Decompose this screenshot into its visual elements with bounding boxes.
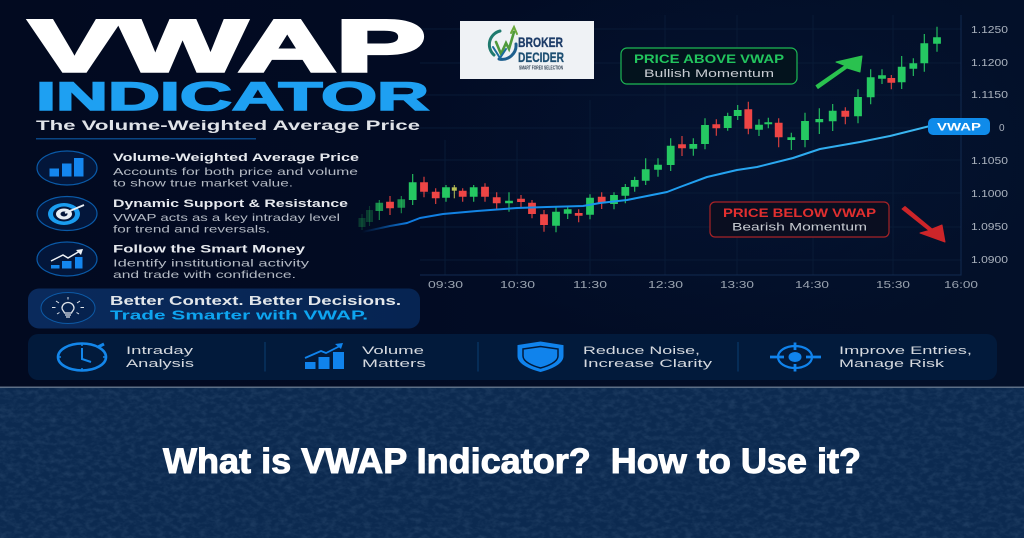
feature: follow the smart money: and trade with confidence. <box>113 270 296 281</box>
VWAP tag <box>928 118 990 135</box>
icon: volume chart <box>305 343 344 369</box>
logo: Broker Decider <box>460 21 594 79</box>
time axis labels: 16:00 <box>944 280 979 291</box>
panel: benefits strip <box>28 334 997 380</box>
icon: bar chart <box>37 151 97 185</box>
icon: stopwatch <box>58 344 106 370</box>
panel: call to action: Better Context. Better Decisions. <box>110 294 401 308</box>
logo: Broker Decider: DECIDER <box>518 49 564 65</box>
panel: call to action <box>28 288 420 328</box>
icon: crosshair <box>770 342 821 372</box>
callout: price above VWAP: Bullish Momentum <box>644 68 774 80</box>
price axis labels: 0 <box>999 123 1005 134</box>
feature: follow the smart money: Follow the Smart Money <box>113 244 305 256</box>
feature: volume-weighted average price: Volume-Weighted Average Price <box>113 152 359 164</box>
logo: Broker Decider: BROKER <box>518 34 563 50</box>
price axis labels: 1.0950 <box>971 222 1009 233</box>
banner: textured footer <box>0 386 1024 538</box>
time axis labels: 13:30 <box>720 280 755 291</box>
callout: price below VWAP <box>710 202 889 237</box>
benefit: reduce noise: Reduce Noise, <box>583 345 700 357</box>
subtitle: The Volume-Weighted Average Price <box>36 117 420 133</box>
callout: price above VWAP <box>621 48 797 84</box>
time axis labels: 15:30 <box>876 280 911 291</box>
icon: rising chart <box>37 242 97 276</box>
arrow: bearish down <box>902 206 945 242</box>
icon: light bulb <box>41 292 95 324</box>
icon: target <box>37 196 97 230</box>
callout: price below VWAP: Bearish Momentum <box>732 222 867 234</box>
feature: dynamic support and resistance <box>37 196 348 236</box>
price axis labels <box>971 25 1009 266</box>
title: INDICATOR: INDICATOR <box>36 75 429 119</box>
feature: dynamic support and resistance: VWAP acts as a key intraday level <box>113 213 340 224</box>
time axis labels: 09:30 <box>428 280 464 291</box>
time axis labels: 10:30 <box>500 280 536 291</box>
benefit: intraday analysis: Intraday <box>126 345 194 357</box>
logo mark <box>489 27 517 59</box>
time axis labels: 14:30 <box>795 280 830 291</box>
callout: price above VWAP: PRICE ABOVE VWAP <box>634 54 784 66</box>
benefit: reduce noise: Increase Clarity <box>583 358 713 370</box>
price axis labels: 1.1200 <box>971 58 1009 69</box>
chart axes <box>420 15 961 275</box>
feature: follow the smart money <box>37 242 310 281</box>
feature: volume-weighted average price <box>37 151 359 190</box>
callout: price below VWAP: PRICE BELOW VWAP <box>723 208 876 220</box>
benefit: reduce noise <box>518 342 713 372</box>
VWAP tag: VWAP <box>937 122 981 134</box>
panel: price chart <box>362 0 1024 330</box>
price axis labels: 1.0900 <box>971 255 1009 266</box>
benefit: volume matters <box>305 343 427 370</box>
feature: volume-weighted average price: Accounts for both price and volume <box>113 167 358 178</box>
logo: Broker Decider: SMART FOREX SELECTION <box>519 66 563 72</box>
VWAP line <box>362 126 930 232</box>
price axis labels: 1.1250 <box>971 25 1009 36</box>
price axis labels: 1.1050 <box>971 156 1009 167</box>
icon: shield <box>518 342 563 372</box>
background <box>0 0 1024 388</box>
benefit: improve entries <box>770 342 972 372</box>
benefit: improve entries: Manage Risk <box>839 358 945 370</box>
benefit: volume matters: Volume <box>362 345 424 357</box>
feature: dynamic support and resistance: Dynamic Support & Resistance <box>113 198 348 210</box>
benefit: improve entries: Improve Entries, <box>839 345 972 357</box>
benefit: intraday analysis <box>58 344 195 370</box>
time axis labels <box>428 280 979 291</box>
time axis labels: 11:30 <box>573 280 608 291</box>
panel: call to action: Trade Smarter with VWAP. <box>110 308 368 322</box>
price axis labels: 1.1000 <box>971 189 1009 200</box>
price axis labels: 1.1150 <box>971 90 1009 101</box>
benefit: volume matters: Matters <box>362 358 427 370</box>
title: VWAP: VWAP <box>30 6 426 87</box>
candlesticks <box>362 27 937 232</box>
feature: follow the smart money: Identify institutional activity <box>113 258 310 270</box>
benefit: intraday analysis: Analysis <box>126 358 195 370</box>
chart grid <box>420 15 961 275</box>
arrow: bullish up <box>816 56 862 88</box>
feature: volume-weighted average price: to show true market value. <box>113 178 293 190</box>
time axis labels: 12:30 <box>648 280 684 291</box>
footer headline: What is VWAP Indicator? How to Use it? <box>163 442 861 481</box>
feature: dynamic support and resistance: for trend and reversals. <box>113 224 270 236</box>
